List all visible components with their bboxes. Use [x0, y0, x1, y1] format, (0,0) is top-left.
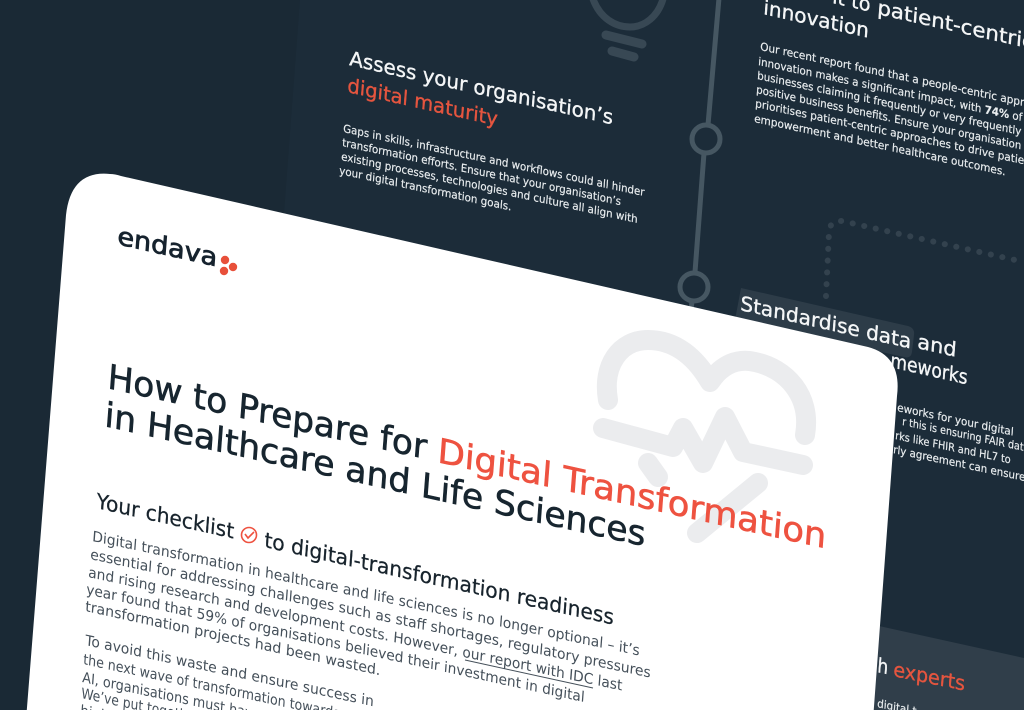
heading highlight	[735, 288, 914, 357]
intro paragraph: year found that 59% of organisations believed their investment in digital	[86, 582, 585, 706]
heading: assess your organisation's: Assess your organisation’s	[349, 46, 614, 129]
heading: standardise data and frameworks	[740, 291, 969, 389]
title: Digital Transformation	[436, 431, 828, 557]
dotted connector	[826, 221, 1024, 296]
body text: skills gaps: your digital transformation goals.	[339, 164, 512, 214]
panel: assess digital maturity	[339, 46, 645, 226]
title: in Healthcare and Life Sciences	[103, 395, 647, 555]
body text: people-centric approach: empowerment and better healthcare outcomes.	[754, 112, 1006, 178]
icon: check mark	[242, 528, 256, 542]
panel: standardise data	[735, 288, 1024, 484]
heading: standardise data and frameworks: Standardise data	[740, 291, 912, 353]
body text: people-centric approach: innovation makes a significant impact, with 74% of	[758, 55, 1024, 124]
body text: skills gaps: Gaps in skills, infrastructure and workflows could all hinder	[343, 122, 645, 199]
timeline connector	[680, 0, 720, 320]
logo: endava	[117, 221, 237, 275]
intro paragraph: Digital transformation in healthcare and life sciences is no longer optional – it’s	[92, 529, 640, 660]
subtitle with checklist icon: to digital-transformation readiness	[264, 528, 615, 630]
panel: work with experts	[860, 624, 1024, 710]
subtitle with checklist icon: Your checklist	[95, 489, 235, 544]
body text: skills gaps: transformation efforts. Ensure that your organisation’s	[342, 136, 622, 208]
intro paragraph: and rising research and development costs. However, our report with IDC last	[88, 565, 623, 695]
intro paragraph: transformation projects had been wasted.	[85, 599, 381, 679]
second paragraph: To avoid this waste and ensure success in	[84, 633, 374, 710]
heading: standardise data and frameworks: and	[917, 329, 957, 362]
subtitle with checklist icon	[95, 489, 615, 630]
body text: frameworks: rks like FHIR and HL7 to	[895, 429, 1011, 467]
heading accent: experts: experts	[893, 657, 966, 696]
title: How to Prepare for	[106, 357, 428, 468]
icon: heart with pulse	[603, 340, 806, 533]
heading: commit to patient-centric innovation	[763, 0, 1024, 54]
heading fragment: with: h	[877, 653, 889, 679]
title	[103, 357, 828, 557]
body text: frameworks: eworks for your digital	[897, 401, 1014, 439]
body text: people-centric approach	[754, 40, 1024, 178]
logo: endava: endava	[117, 221, 218, 272]
heading: standardise data and frameworks: meworks	[890, 348, 969, 389]
panel: white document card	[26, 174, 898, 710]
body text: skills gaps: existing processes, technologies and culture all align with	[341, 150, 638, 226]
heading accent: digital maturity: digital maturity	[347, 73, 499, 131]
intro paragraph: essential for addressing challenges such as staff shortages, regulatory pressures	[90, 547, 651, 682]
panel: patient-centric innovation	[754, 0, 1024, 178]
icon: light bulb	[593, 0, 663, 57]
body text: frameworks	[893, 401, 1024, 484]
